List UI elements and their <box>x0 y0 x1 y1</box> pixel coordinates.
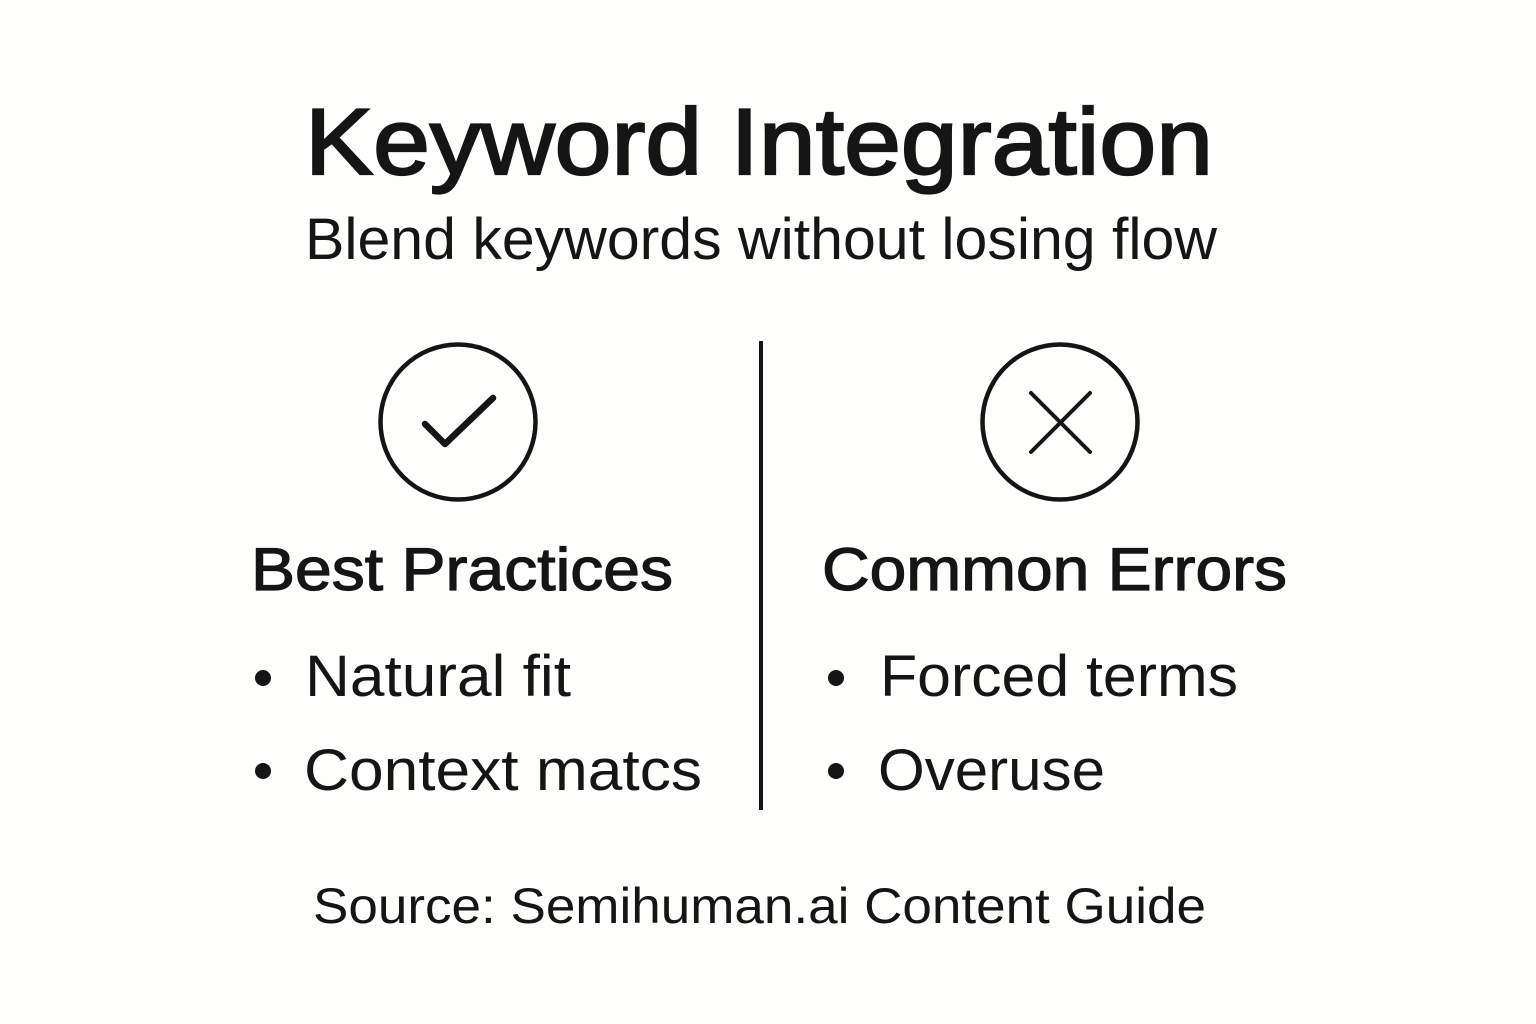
title: Keyword Integration <box>305 89 1213 194</box>
source line: Source: Semihuman.ai Content Guide <box>313 878 1206 934</box>
heading: best practices: Best Practices <box>251 536 673 603</box>
bullet list: common errors: Overuse <box>878 738 1105 803</box>
bullet list: best practices <box>255 644 702 803</box>
bullet list: common errors: Forced terms <box>880 644 1238 709</box>
icon: check mark in circle <box>380 344 536 500</box>
panel: best practices <box>251 344 702 803</box>
divider <box>759 341 763 810</box>
bullet list: best practices: Natural fit <box>305 644 571 709</box>
bullet list: common errors <box>828 644 1238 803</box>
heading: common errors: Common Errors <box>822 536 1287 603</box>
subtitle: Blend keywords without losing flow <box>305 207 1218 272</box>
panel: common errors <box>822 344 1287 803</box>
bullet list: best practices: Context matcs <box>304 738 702 803</box>
icon: cross in circle <box>982 344 1138 500</box>
